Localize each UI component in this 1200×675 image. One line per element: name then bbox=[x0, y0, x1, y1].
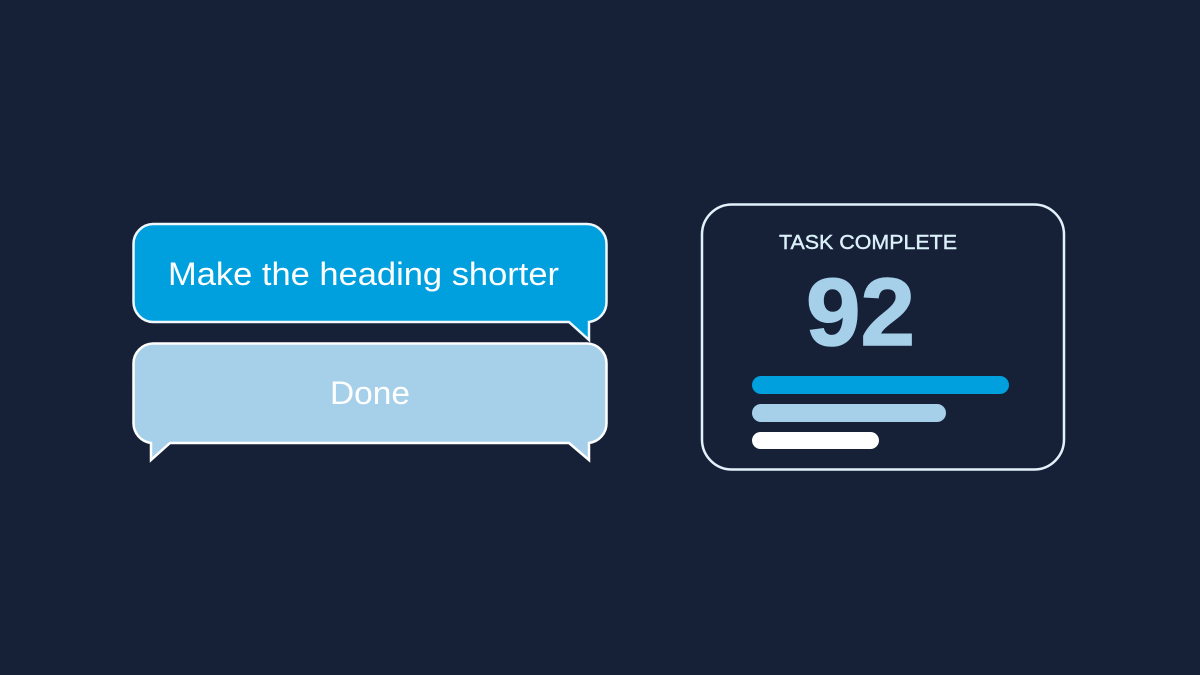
score number: 92 bbox=[806, 259, 915, 366]
card heading: TASK COMPLETE bbox=[779, 232, 957, 254]
reply text: Done bbox=[330, 375, 410, 411]
progress bars bbox=[752, 376, 1009, 449]
chat bubble: reply bbox=[133, 344, 607, 460]
request text: Make the heading shorter bbox=[168, 256, 559, 292]
bar: blue bbox=[752, 376, 1009, 394]
chat bubble: request bbox=[133, 224, 607, 340]
bar: light blue bbox=[752, 404, 946, 422]
task card bbox=[702, 204, 1064, 470]
bar: white bbox=[752, 432, 879, 449]
card outline bbox=[702, 204, 1064, 470]
